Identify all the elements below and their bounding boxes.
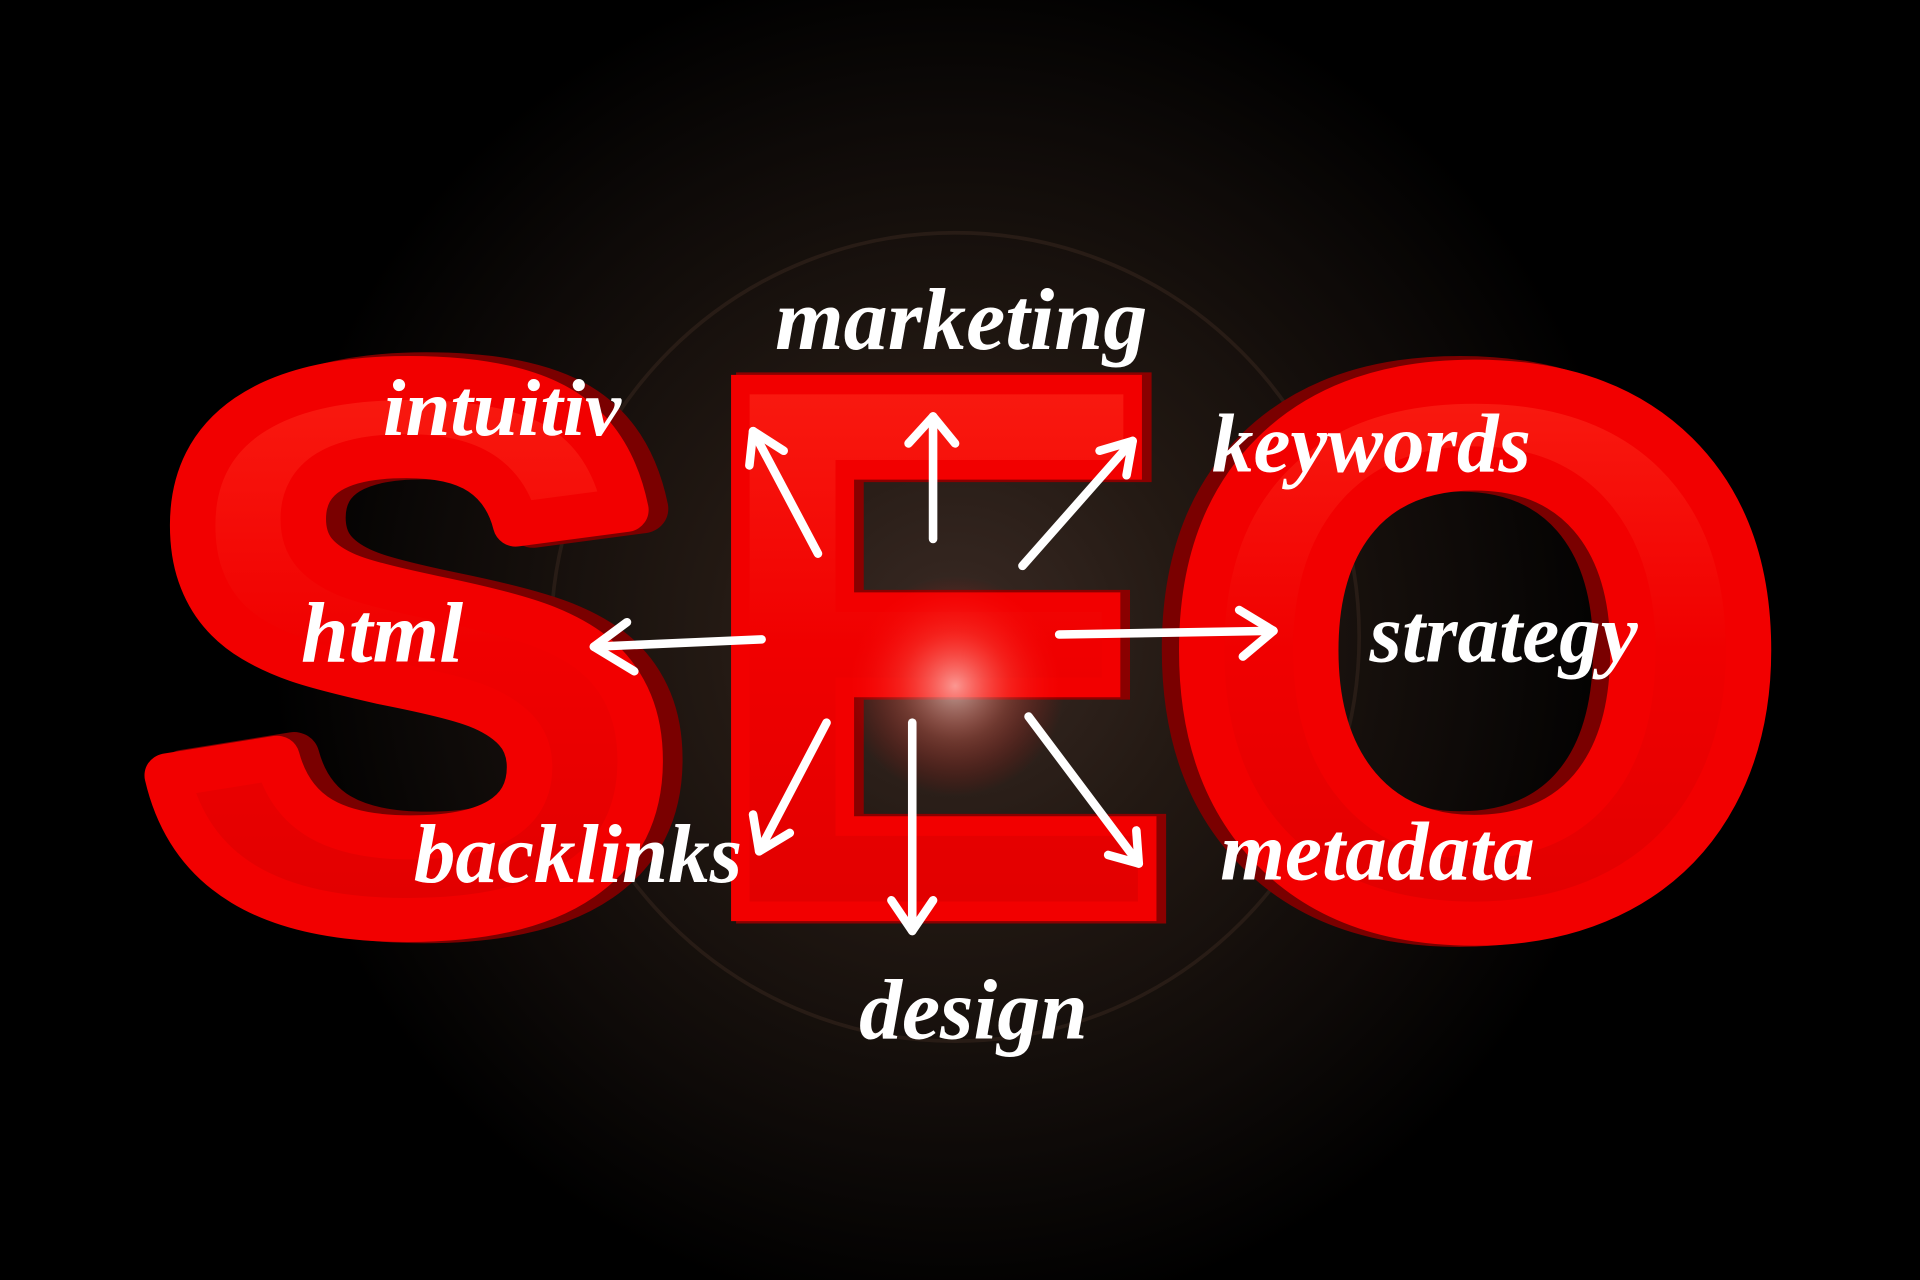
label: strategy: strategy <box>1369 588 1639 680</box>
letter E: E <box>699 219 1183 1074</box>
center glow <box>845 576 1065 796</box>
letter O: O <box>1155 223 1767 1078</box>
arrow: down-right <box>1029 717 1139 864</box>
letter S: S <box>162 219 688 1074</box>
label: html: html <box>301 585 463 680</box>
letter S: S <box>144 220 671 1076</box>
label: metadata: metadata <box>1220 806 1535 898</box>
label: keywords: keywords <box>1212 399 1531 491</box>
arrow: up <box>909 416 955 539</box>
arrow: down-left <box>753 723 827 851</box>
arrow: up-right <box>1022 441 1133 566</box>
letter E: E <box>692 219 1176 1074</box>
label: intuitiv: intuitiv <box>383 364 622 453</box>
arrow: up-left <box>749 431 818 554</box>
label: marketing: marketing <box>775 271 1147 369</box>
handwritten labels <box>301 271 1639 1058</box>
letters: SEO <box>144 219 1782 1079</box>
arrow: down <box>891 723 933 931</box>
arrow: right <box>1059 610 1273 657</box>
letter O: O <box>1169 224 1782 1079</box>
label: backlinks: backlinks <box>414 809 742 901</box>
arrow: left <box>594 622 762 671</box>
arrows <box>594 416 1273 931</box>
label: design: design <box>859 963 1088 1058</box>
